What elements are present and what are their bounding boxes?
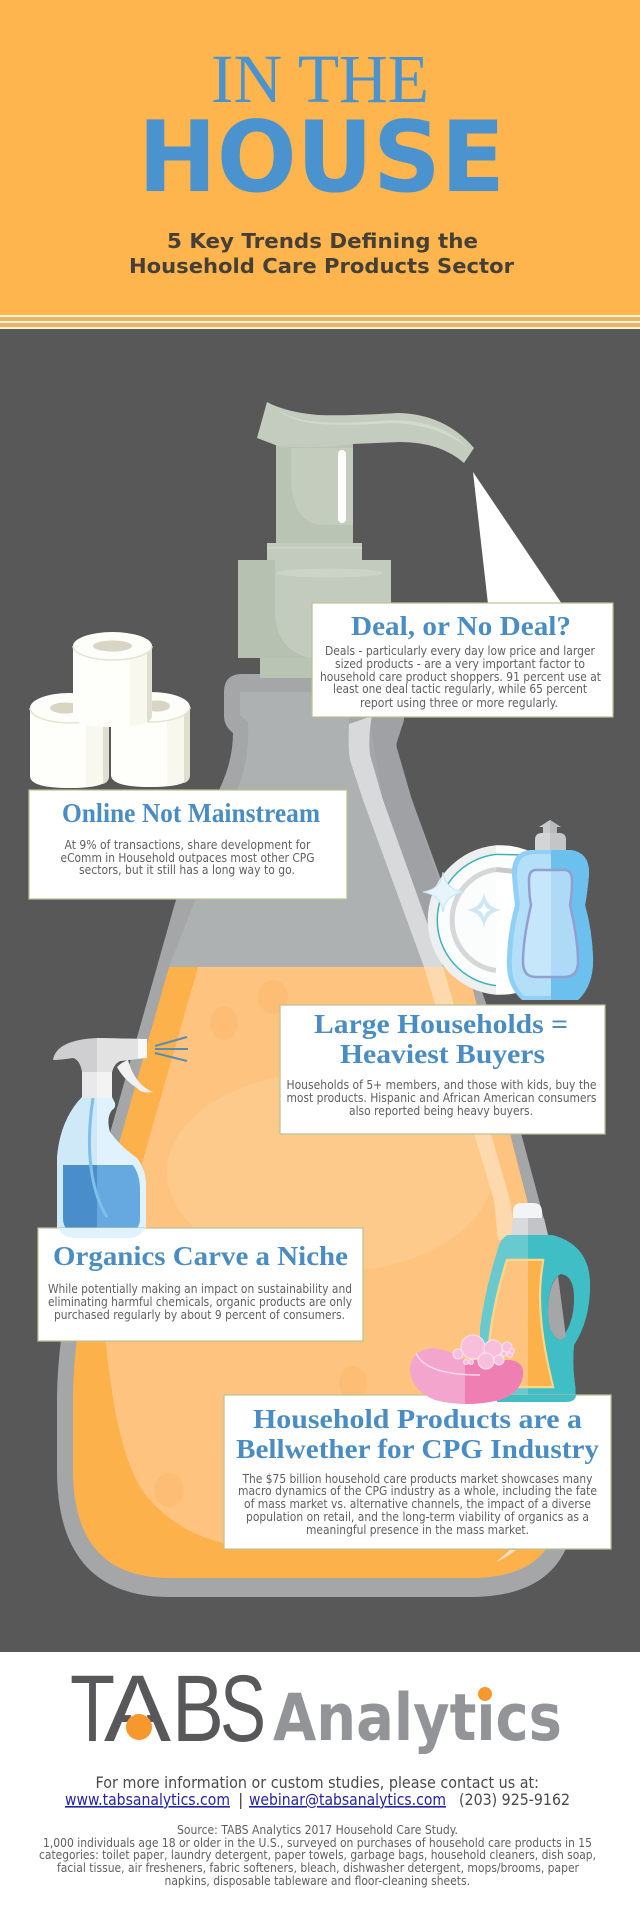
icon: soap bar xyxy=(410,1335,523,1404)
heading: Deal, or No Deal? xyxy=(351,611,571,641)
body text: household care product shoppers. 91 percent use at xyxy=(320,670,601,684)
jug label xyxy=(488,1260,553,1387)
body text: The $75 billion household care products market showcases many xyxy=(242,1472,592,1486)
icon: detergent jug xyxy=(480,1203,590,1402)
icon: spray bottle xyxy=(53,1037,188,1238)
footer panel xyxy=(0,1652,640,1920)
body text xyxy=(48,1282,352,1322)
body text: also reported being heavy buyers. xyxy=(349,1104,533,1118)
body text: sectors, but it still has a long way to go. xyxy=(79,863,295,877)
liquid xyxy=(73,967,560,1578)
subtitle: Household Care Products Sector xyxy=(129,254,515,278)
subtitle: 5 Key Trends Defining the xyxy=(167,229,478,253)
heading: Large Households = xyxy=(314,1009,568,1039)
soap bubbles xyxy=(453,1335,514,1369)
soap bottle cap xyxy=(535,820,566,853)
title: house: HOUSE xyxy=(138,101,505,215)
icon: plate and dish soap xyxy=(423,820,593,1000)
soap bottle label xyxy=(523,870,578,977)
body text: population on retail, and the long-term viability of organics as a xyxy=(246,1510,589,1524)
heading: Online Not Mainstream xyxy=(62,798,320,828)
cap xyxy=(513,1203,542,1218)
card: large households xyxy=(280,1005,605,1134)
card: large households: Heaviest Buyers xyxy=(340,1039,545,1069)
contact details: (203) 925-9162 xyxy=(459,1790,570,1809)
spray head xyxy=(53,1038,147,1072)
jug body xyxy=(480,1235,590,1402)
tube xyxy=(89,1098,107,1217)
body text: Households of 5+ members, and those with kids, buy the xyxy=(286,1078,596,1092)
body text xyxy=(238,1472,597,1537)
soap pump bottle xyxy=(57,402,575,1597)
body text: meaningful presence in the mass market. xyxy=(306,1523,529,1537)
body text: At 9% of transactions, share development for xyxy=(64,838,311,852)
contact details: www.tabsanalytics.com xyxy=(65,1790,230,1809)
top roll xyxy=(73,632,152,727)
detergent jug base over card xyxy=(497,1395,576,1402)
body text: most products. Hispanic and African American consumers xyxy=(286,1091,596,1105)
body text xyxy=(60,838,314,877)
body text: Deals - particularly every day low price and larger xyxy=(325,644,595,658)
spray lines xyxy=(155,1037,188,1061)
heading: Household Products are a xyxy=(253,1404,583,1434)
liquid bubbles xyxy=(154,980,367,1507)
body text: macro dynamics of the CPG industry as a whole, including the fate xyxy=(238,1484,597,1498)
pump xyxy=(238,402,474,678)
source note: Source: TABS Analytics 2017 Household Care Study. xyxy=(177,1823,458,1837)
title: in the: IN THE xyxy=(211,41,429,117)
body text xyxy=(320,644,601,710)
logo xyxy=(70,1656,562,1762)
body text: eComm in Household outpaces most other CPG xyxy=(60,851,314,865)
bottle body xyxy=(57,1097,146,1238)
subtitle xyxy=(129,229,515,278)
card: bellwether xyxy=(224,1395,611,1549)
collar xyxy=(511,1218,528,1236)
card: online not mainstream xyxy=(29,790,347,899)
soap highlight xyxy=(416,1353,480,1375)
body text: purchased regularly by about 9 percent of consumers. xyxy=(54,1308,345,1322)
toilet paper icon xyxy=(30,632,190,788)
header band xyxy=(0,0,640,329)
liquid highlight xyxy=(424,967,516,1240)
right roll xyxy=(111,692,190,787)
logo: Analytics xyxy=(273,1681,562,1756)
logo: T xyxy=(70,1656,115,1762)
dark background panel xyxy=(0,329,640,1652)
soap bottle body xyxy=(507,850,593,1000)
body text: of mass market vs. alternative channels, the impact of a diverse xyxy=(244,1497,591,1511)
body text: eliminating harmful chemicals, organic products are only xyxy=(48,1295,352,1309)
source note: 1,000 individuals age 18 or older in the U.S., surveyed on purchases of household care products in 15 xyxy=(43,1836,592,1850)
sparkles xyxy=(423,872,502,928)
callout: deal or no deal xyxy=(312,472,613,717)
neck xyxy=(82,1072,112,1098)
plate xyxy=(428,845,575,995)
body text: report using three or more regularly. xyxy=(360,696,558,710)
water xyxy=(63,1165,97,1232)
contact details: webinar@tabsanalytics.com xyxy=(249,1790,446,1809)
contact details: For more information or custom studies, please contact us at: xyxy=(96,1773,539,1792)
source note: facial tissue, air fresheners, fabric softeners, bleach, dishwasher detergent, mops/brooms, paper xyxy=(57,1861,579,1875)
logo: B xyxy=(172,1656,224,1762)
icon: spray bottle base over card xyxy=(57,1218,146,1238)
card: organics xyxy=(38,1228,363,1341)
contact details xyxy=(65,1773,570,1809)
source note: napkins, disposable tableware and floor-cleaning sheets. xyxy=(164,1874,470,1888)
logo: S xyxy=(220,1656,266,1762)
body text: least one deal tactic regularly, while 65 percent xyxy=(333,682,587,696)
logo: A xyxy=(104,1656,172,1762)
callout pointer xyxy=(473,472,562,604)
body text xyxy=(286,1078,596,1118)
contact details: | xyxy=(238,1790,243,1809)
heading: Organics Carve a Niche xyxy=(53,1241,348,1271)
body text: While potentially making an impact on sustainability and xyxy=(48,1282,352,1296)
left roll xyxy=(30,693,109,788)
source note xyxy=(39,1823,596,1888)
trigger xyxy=(117,1060,153,1092)
card: bellwether: Bellwether for CPG Industry xyxy=(236,1434,600,1464)
body text: sized products - are a very important factor to xyxy=(335,657,585,671)
handle opening xyxy=(548,1274,574,1340)
bottle glass xyxy=(57,674,575,1597)
